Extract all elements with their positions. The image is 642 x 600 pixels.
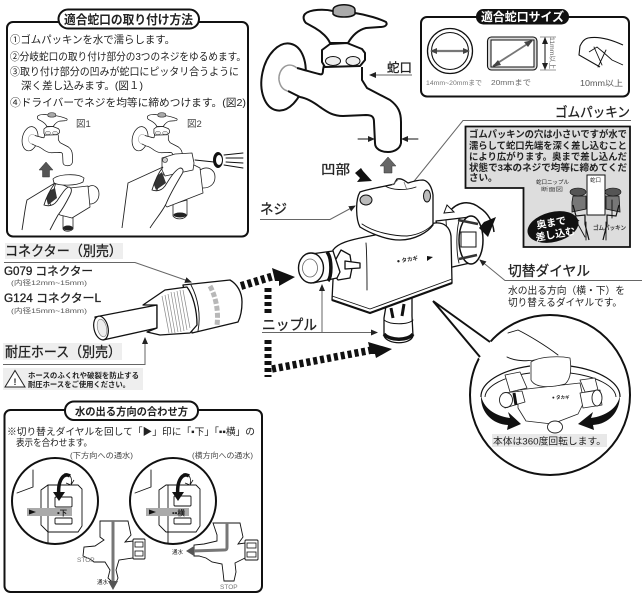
main device illustration: ● タカギ	[396, 254, 419, 265]
nipple label: ニップル	[262, 317, 317, 334]
rectangular faucet size: 11mm以上	[548, 37, 557, 69]
rotating device: ● タカギ	[552, 394, 570, 401]
main faucet illustration	[255, 5, 401, 152]
connector collar	[183, 280, 242, 333]
panel: water direction adjustment	[4, 402, 262, 592]
dial circle: sideways setting	[130, 458, 216, 544]
section diagram: sideways flow: 通水	[172, 548, 184, 556]
cross-section diagram	[536, 175, 621, 240]
connector grip	[143, 287, 197, 335]
faucet label	[370, 61, 412, 75]
rubber packing heading: ゴムパッキン	[555, 104, 630, 120]
section diagram: downward flow	[77, 521, 145, 590]
panel title: water direction: 水の出る方向の合わせ方	[75, 405, 188, 418]
rotation caption: 本体は360度回転します。	[493, 436, 606, 448]
instruction steps: ③取り付け部分の凹みが蛇口にピッタリ合うように	[10, 65, 239, 78]
rotation ring	[481, 366, 620, 397]
figure 1: inserting the adapter onto the faucet: 図1	[76, 119, 91, 130]
callout text: 状態で3本のネジで均等に締めてくだ	[469, 162, 628, 174]
connector labels: (内径15mm~18mm)	[11, 306, 87, 315]
hand	[507, 330, 558, 361]
hose warning note	[3, 368, 143, 390]
downward flow label: (下方向への通水)	[70, 450, 134, 460]
dial label and description	[480, 260, 642, 309]
screw label: ネジ	[260, 201, 287, 217]
panel title: mounting method	[58, 10, 199, 28]
figure 2: tightening screws with a screwdriver	[122, 113, 243, 228]
rectangular faucet size: 20mmまで	[491, 78, 531, 87]
small rubber packing label: ゴムパッキン	[593, 224, 626, 232]
dial label and description: 切替ダイヤル	[508, 263, 590, 279]
faucet label: 蛇口	[387, 61, 412, 75]
cross-section diagram: 蛇口	[590, 176, 601, 184]
faucet width arrows	[358, 138, 418, 140]
rubber packing heading	[407, 104, 631, 190]
callout text	[469, 128, 628, 184]
callout text: により広がります。奥まで差し込んだ	[469, 151, 627, 163]
sideways flow label: (横方向への通水)	[192, 450, 253, 460]
instruction steps: ①ゴムパッキンを水で濡らします。	[10, 33, 175, 46]
callout bubble: insert fully: 奥まで	[535, 214, 567, 232]
callout text: 濡らして蛇口先端を深く差し込むこと	[469, 140, 627, 152]
section diagram: downward flow: 通水	[97, 578, 109, 586]
dial label and description: 水の出る方向（横・下）を	[508, 284, 625, 297]
hose warning note: 耐圧ホースをご使用ください。	[28, 380, 130, 389]
section diagram: downward flow: STOP	[77, 557, 95, 564]
panel: rubber packing callout	[466, 126, 630, 248]
figure 1: inserting the adapter onto the faucet	[20, 113, 99, 231]
collar	[357, 179, 433, 240]
dial label and description: 切り替えるダイヤルです。	[508, 296, 622, 309]
callout text: ゴムパッキンの穴は小さいですが水で	[469, 128, 627, 140]
panel instructions: ※切り替えダイヤルを回して「▶」印に「▪下」「▪▪横」の	[7, 425, 255, 438]
rotation arrows	[481, 395, 521, 430]
pressure hose label: 耐圧ホース（別売）	[5, 344, 121, 360]
callout text: さい。	[469, 173, 498, 184]
main device illustration	[298, 179, 496, 343]
panel title: sizes: 適合蛇口サイズ	[481, 9, 564, 24]
dial circle: sideways setting: ▪▪横	[172, 508, 185, 518]
round faucet size	[426, 28, 482, 87]
spout length size	[579, 37, 623, 88]
panel instructions: 表示を合わせます。	[16, 436, 92, 449]
panel instructions	[7, 425, 255, 449]
detail circle: 360 degree rotation	[433, 301, 630, 475]
section diagram: sideways flow: STOP	[220, 584, 238, 591]
arrow: insert upward	[380, 157, 396, 173]
connector labels: G079 コネクター	[4, 265, 93, 278]
section diagram: sideways flow	[172, 523, 258, 591]
bottom nipple	[384, 298, 413, 343]
dial rotation arrows	[444, 203, 496, 237]
instruction steps: 深く差し込みます。(図１)	[21, 79, 143, 92]
callout bubble: insert fully: 差し込む	[534, 224, 576, 244]
side nipple	[298, 250, 360, 283]
instruction steps: ②分岐蛇口の取り付け部分の3つのネジをゆるめます。	[10, 50, 246, 63]
dial circle: downward setting: ▪下	[57, 508, 68, 518]
instruction steps	[10, 33, 246, 109]
connector labels: G124 コネクターL	[4, 292, 102, 305]
body	[332, 223, 452, 313]
hose warning note: !	[14, 377, 16, 387]
figure 2: tightening screws with a screwdriver: 図2	[187, 119, 202, 130]
recess label	[321, 162, 372, 182]
round faucet size: 14mm~20mmまで	[426, 79, 482, 87]
striped flow arrow: to side nipple	[241, 268, 295, 286]
screw label	[260, 201, 355, 220]
cross-section diagram: 断面図	[541, 186, 563, 193]
cross-section diagram: 蛇口ニップル	[536, 178, 569, 186]
rotating device	[500, 357, 602, 433]
dial	[436, 216, 483, 268]
spout length size: 10mm以上	[580, 79, 623, 88]
hose warning note: ホースのふくれや破裂を防止する	[28, 371, 139, 380]
hose	[95, 305, 157, 340]
panel title: water direction	[65, 402, 198, 420]
dial circle: downward setting	[12, 458, 98, 544]
rectangular faucet size	[488, 37, 557, 87]
connector labels: (内径12mm~15mm)	[11, 278, 87, 287]
callout bubble: insert fully	[524, 206, 582, 248]
panel title: mounting method: 適合蛇口の取り付け方法	[64, 12, 193, 27]
striped flow arrow: to bottom nipple	[268, 288, 392, 377]
instruction steps: ④ドライバーでネジを均等に締めつけます。(図2)	[10, 96, 246, 109]
connector labels: コネクター（別売）	[5, 243, 122, 259]
panel: faucet mounting method	[7, 10, 248, 236]
pressure hose label	[3, 338, 145, 364]
panel: compatible faucet sizes	[421, 9, 629, 96]
recess label: 凹部	[321, 162, 350, 177]
connector labels	[4, 243, 191, 315]
hose connector illustration	[91, 280, 242, 341]
nipple label	[262, 285, 377, 334]
